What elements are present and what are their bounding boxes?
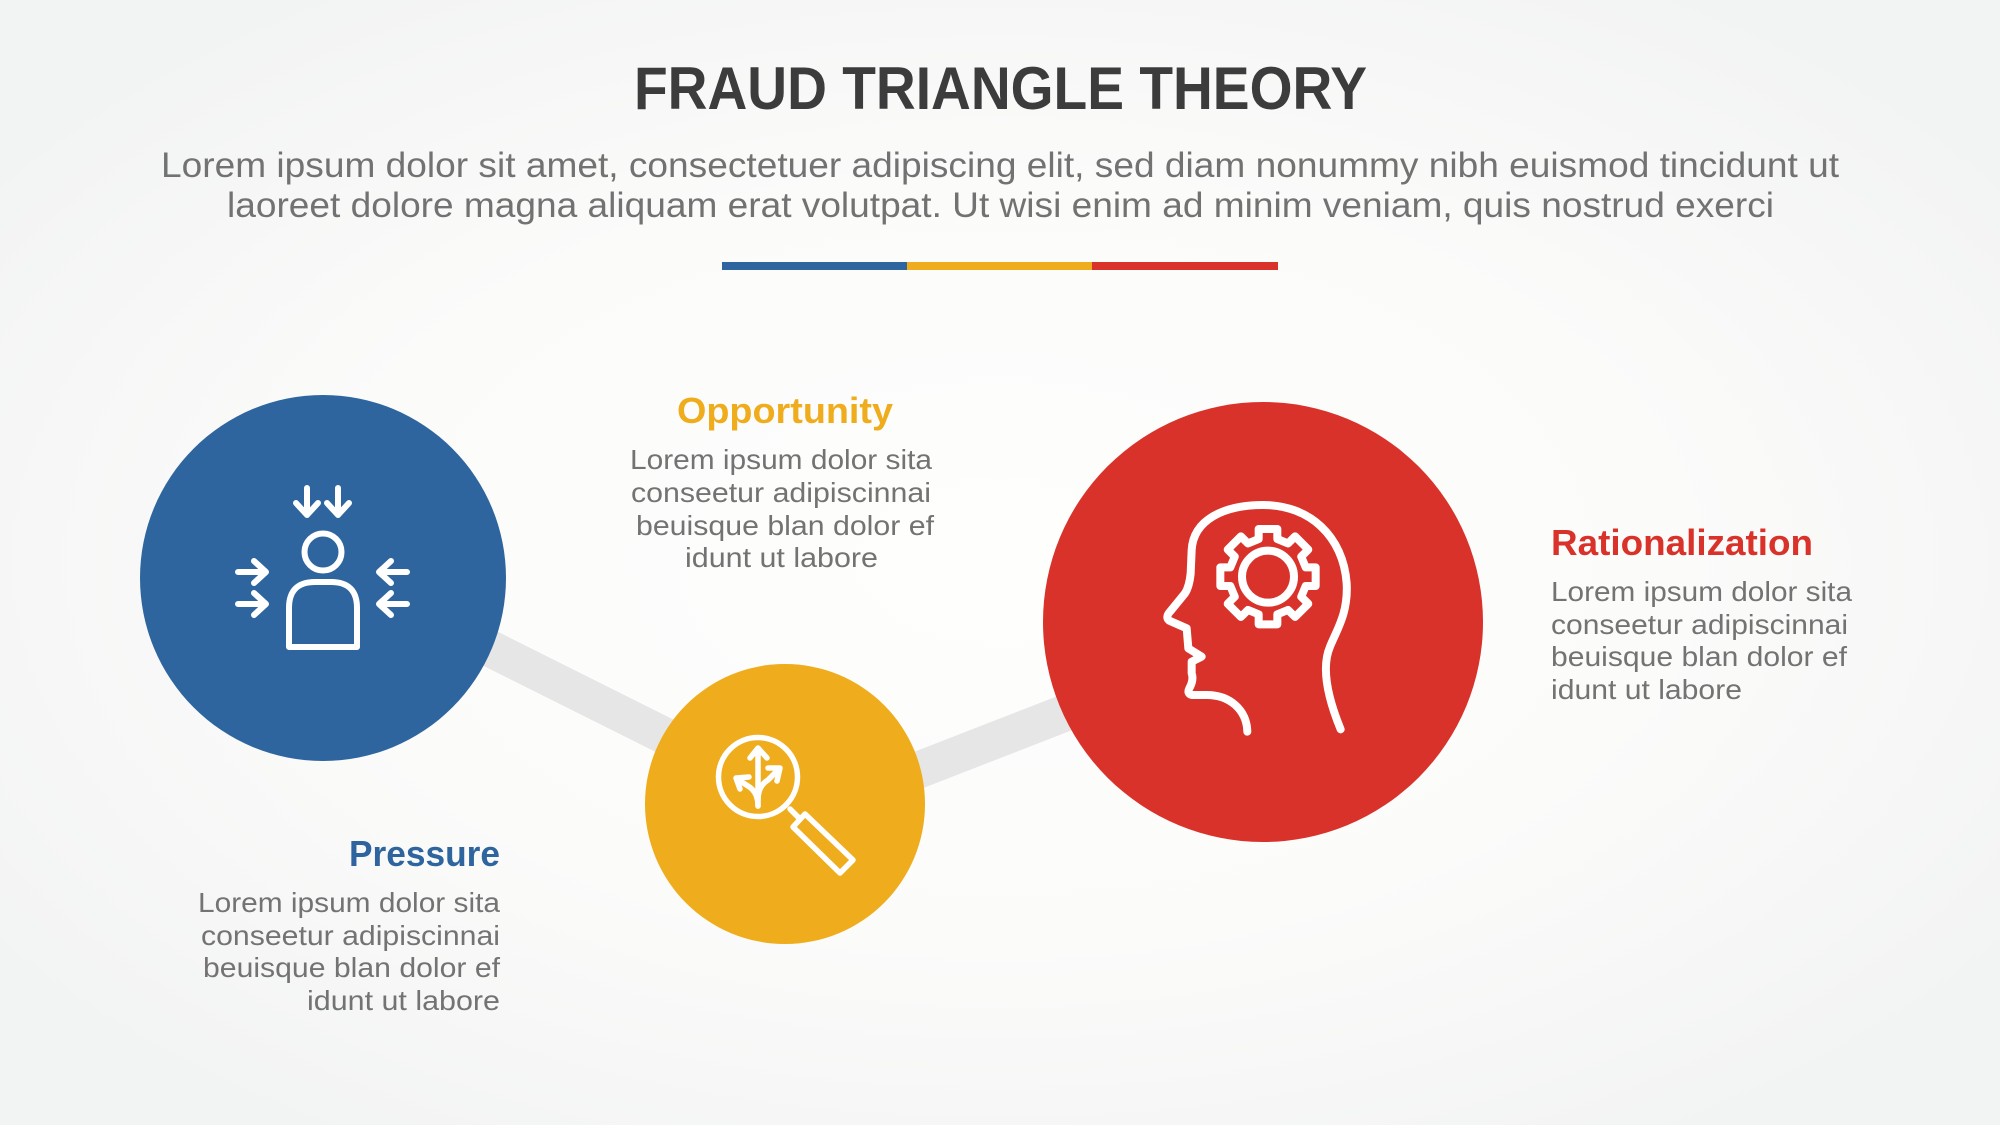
title: FRAUD TRIANGLE THEORY [634,55,1367,122]
circle: pressure [140,395,506,761]
icon: magnifier with branching arrows [718,738,853,873]
circle: rationalization [1043,402,1483,842]
text block: rationalization: Lorem ipsum dolor sita [1551,576,1852,607]
text block: pressure [198,887,500,1016]
text block: pressure: beuisque blan dolor ef [203,952,500,983]
text block: pressure: idunt ut labore [307,985,500,1016]
text block: pressure: conseetur adipiscinnai [201,920,500,951]
subtitle text block: laoreet dolore magna aliquam erat volutpat. Ut wisi enim ad minim veniam, quis nostrud exerci [227,186,1774,225]
text block: opportunity: beuisque blan dolor ef [636,510,934,541]
subtitle text block [161,146,1839,225]
text block: rationalization: idunt ut labore [1551,674,1742,705]
text block: opportunity [630,444,934,573]
subtitle text block: Lorem ipsum dolor sit amet, consectetuer adipiscing elit, sed diam nonummy nibh euismod tincidunt ut [161,146,1839,185]
circle: opportunity [645,664,925,944]
icon: head with gear [1167,505,1347,732]
text block: pressure: Lorem ipsum dolor sita [198,887,500,918]
text block: opportunity: idunt ut labore [685,542,878,573]
heading: rationalization: Rationalization [1551,522,1813,563]
connector: opportunity to rationalization [785,636,1263,822]
text block: rationalization: conseetur adipiscinnai [1551,609,1848,640]
tricolor title divider [722,262,1278,270]
text block: opportunity: Lorem ipsum dolor sita [630,444,932,475]
icon: person under pressure [238,488,407,647]
heading: pressure: Pressure [349,833,500,874]
text block: rationalization [1551,576,1852,705]
text block: opportunity: conseetur adipiscinnai [631,477,931,508]
heading: opportunity: Opportunity [677,390,893,431]
connector: pressure to opportunity [323,565,785,796]
text block: rationalization: beuisque blan dolor ef [1551,641,1847,672]
